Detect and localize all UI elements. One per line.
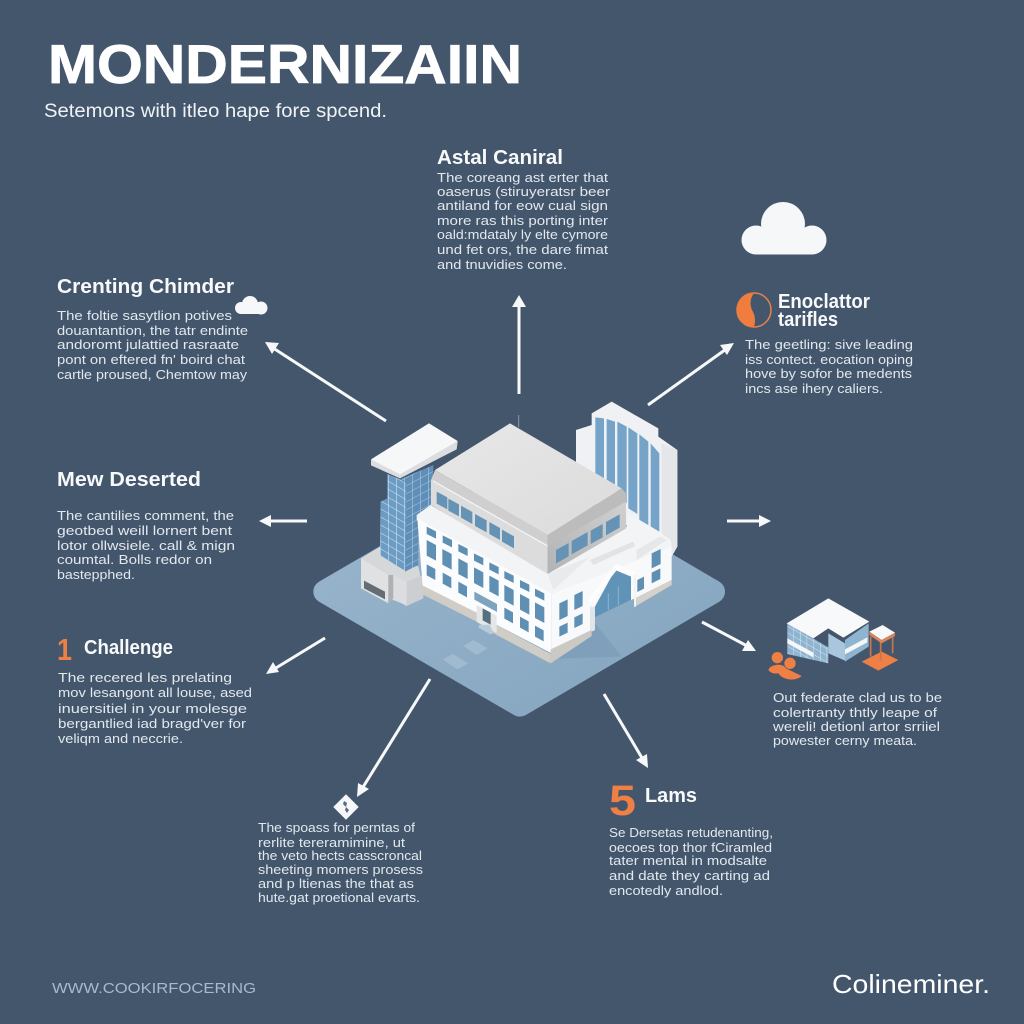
text block: andoromt julattied rasraate bbox=[57, 337, 239, 352]
arrow: bottom left bbox=[357, 679, 430, 797]
text block: encotedly andlod. bbox=[609, 883, 723, 898]
text block bbox=[57, 508, 235, 582]
number 1: 1 bbox=[57, 632, 72, 667]
text block: veliqm and neccrie. bbox=[58, 731, 183, 746]
text block: oald:mdataly ly elte cymore bbox=[437, 227, 608, 242]
arrow: left bbox=[259, 515, 307, 527]
text block: mov lesangont all louse, ased bbox=[58, 685, 252, 700]
heading line 2: tarifles bbox=[778, 309, 838, 331]
left glass tower bbox=[361, 423, 458, 606]
text block bbox=[437, 170, 611, 272]
text block: The coreang ast erter that bbox=[437, 170, 608, 185]
text block: the veto hects casscroncal bbox=[258, 848, 422, 863]
footer brand: Colineminer. bbox=[832, 969, 990, 999]
text block: more ras this porting inter bbox=[437, 213, 609, 228]
panel: right lower note bbox=[768, 598, 942, 748]
text block: oecoes top thor fCiramled bbox=[609, 840, 772, 855]
arrow: lower left bbox=[266, 638, 325, 674]
icon: cloud bbox=[742, 202, 826, 254]
main block bbox=[417, 423, 672, 663]
arrow: right bbox=[727, 515, 771, 527]
heading: Mew Deserted bbox=[57, 469, 201, 491]
text block: The cantilies comment, the bbox=[57, 508, 234, 523]
text block: rerlite tereramimine, ut bbox=[258, 835, 405, 850]
text block: and tnuvidies come. bbox=[437, 257, 567, 272]
text block: coumtal. Bolls redor on bbox=[57, 552, 212, 567]
heading: Astal Caniral bbox=[437, 147, 563, 169]
footer url: WWW.COOKIRFOCERING bbox=[52, 980, 256, 997]
arrow: up bbox=[512, 295, 526, 394]
text block: hute.gat proetional evarts. bbox=[258, 890, 420, 905]
icon: small cloud bbox=[235, 296, 268, 314]
back glass tower bbox=[576, 402, 677, 557]
text block: lotor ollwsiele. call & mign bbox=[57, 538, 235, 553]
text block bbox=[745, 337, 913, 396]
subtitle: Setemons with itleo hape fore spcend. bbox=[44, 101, 387, 122]
text block: und fet ors, the dare fimat bbox=[437, 242, 608, 257]
platform bbox=[325, 478, 713, 705]
text block bbox=[772, 690, 942, 748]
text block: oaserus (stiruyeratsr beer bbox=[437, 184, 611, 199]
title: MONDERNIZAIIN bbox=[48, 33, 522, 95]
central isometric building bbox=[325, 402, 713, 705]
text block: The foltie sasytlion potives bbox=[57, 308, 232, 323]
text block: powester cerny meata. bbox=[773, 733, 917, 748]
panel: Challenge bbox=[57, 632, 252, 746]
panel: Enoclattor tarifles bbox=[737, 291, 913, 396]
text block: pont on eftered fn' boird chat bbox=[57, 352, 245, 367]
heading: Lams bbox=[645, 785, 697, 807]
antenna bbox=[517, 415, 520, 427]
panel: Astal Caniral bbox=[437, 147, 611, 272]
panel: Crenting Chimder bbox=[57, 276, 248, 382]
heading: Challenge bbox=[84, 637, 173, 659]
icon: orange circle bbox=[737, 293, 771, 327]
heading: Crenting Chimder bbox=[57, 276, 234, 298]
text block: and date they carting ad bbox=[609, 868, 770, 883]
text block: colertranty thtly leape of bbox=[773, 705, 937, 720]
arrow: bottom right bbox=[604, 694, 648, 768]
text block bbox=[258, 820, 423, 905]
text block bbox=[57, 308, 248, 382]
panel: bottom centre note bbox=[258, 794, 423, 905]
text block: and p ltienas the that as bbox=[258, 876, 414, 891]
text block: The geetling: sive leading bbox=[745, 337, 913, 352]
text block: inuersitiel in your molesge bbox=[58, 701, 247, 716]
text block bbox=[609, 825, 773, 898]
text block: bastepphed. bbox=[57, 567, 135, 582]
arrows bbox=[259, 295, 771, 797]
text block: bergantlied iad bragd'ver for bbox=[58, 716, 247, 731]
number 5: 5 bbox=[609, 777, 636, 825]
icon: diamond bbox=[333, 794, 359, 820]
text block: The spoass for perntas of bbox=[258, 820, 415, 835]
text block: Se Dersetas retudenanting, bbox=[609, 825, 773, 840]
arrow: upper left bbox=[265, 342, 386, 421]
heading: Enoclattor bbox=[778, 291, 870, 313]
arrow: upper right bbox=[648, 343, 734, 405]
text block: Out federate clad us to be bbox=[773, 690, 942, 705]
text block: incs ase ihery caliers. bbox=[745, 381, 883, 396]
text block: geotbed weill lornert bent bbox=[57, 523, 232, 538]
panel: Mew Deserted bbox=[57, 469, 235, 582]
text block bbox=[58, 670, 252, 746]
text block: iss contect. eocation oping bbox=[745, 352, 913, 367]
text block: tater mental in modsalte bbox=[609, 853, 767, 868]
text block: antiland for eow cual sign bbox=[437, 198, 608, 213]
icon: small campus building bbox=[768, 598, 898, 679]
panel: Lams bbox=[609, 777, 773, 898]
text block: wereli! detionl artor srriiel bbox=[772, 719, 940, 734]
arrow: right lower bbox=[702, 622, 756, 651]
text block: sheeting momers prosess bbox=[258, 862, 423, 877]
text block: douantantion, the tatr endinte bbox=[57, 323, 248, 338]
text block: hove by sofor be medents bbox=[745, 366, 912, 381]
text block: The recered les prelating bbox=[58, 670, 232, 685]
text block: cartle proused, Chemtow may bbox=[57, 367, 247, 382]
